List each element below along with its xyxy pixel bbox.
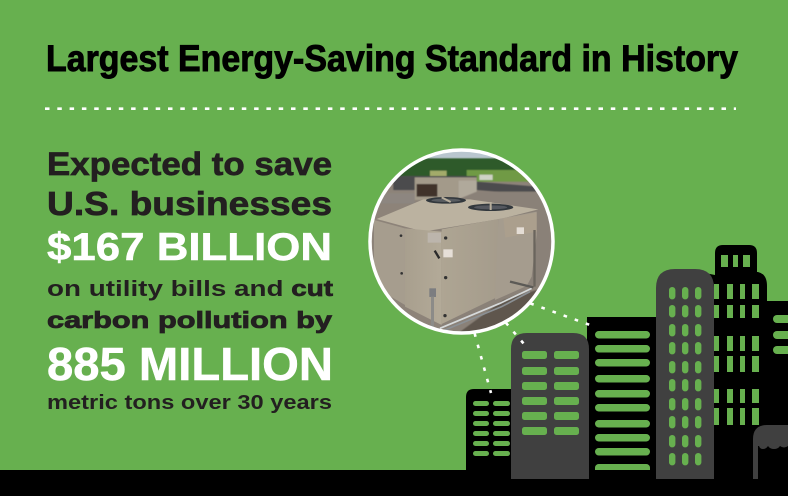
- illustration: city skyline: [0, 245, 788, 496]
- dotted callout lines: [475, 303, 590, 393]
- wide black building: [587, 317, 658, 477]
- line: U.S. businesses: U.S. businesses: [47, 185, 332, 222]
- photo: rooftop HVAC unit in circle: [368, 148, 555, 335]
- grey building left: [511, 333, 589, 479]
- line: metric tons over 30 years: metric tons over 30 years: [47, 392, 332, 414]
- black tower with cap: [700, 245, 767, 480]
- grey tall building: [656, 269, 714, 479]
- line: expected to save: Expected to save: [47, 146, 332, 182]
- title: Largest Energy-Saving Standard in History: [46, 38, 738, 79]
- stat: 885 million: 885 MILLION: [47, 338, 333, 390]
- small black building: [466, 389, 514, 480]
- line: carbon pollution by: carbon pollution by: [47, 307, 332, 333]
- black building far right: [767, 301, 788, 481]
- text block: savings statement: [47, 146, 334, 414]
- ground: [0, 470, 788, 496]
- grey awning building: [753, 425, 788, 479]
- line: on utility bills and cut: on utility bills and cut: [47, 276, 334, 301]
- stat: $167 billion: $167 BILLION: [47, 226, 332, 269]
